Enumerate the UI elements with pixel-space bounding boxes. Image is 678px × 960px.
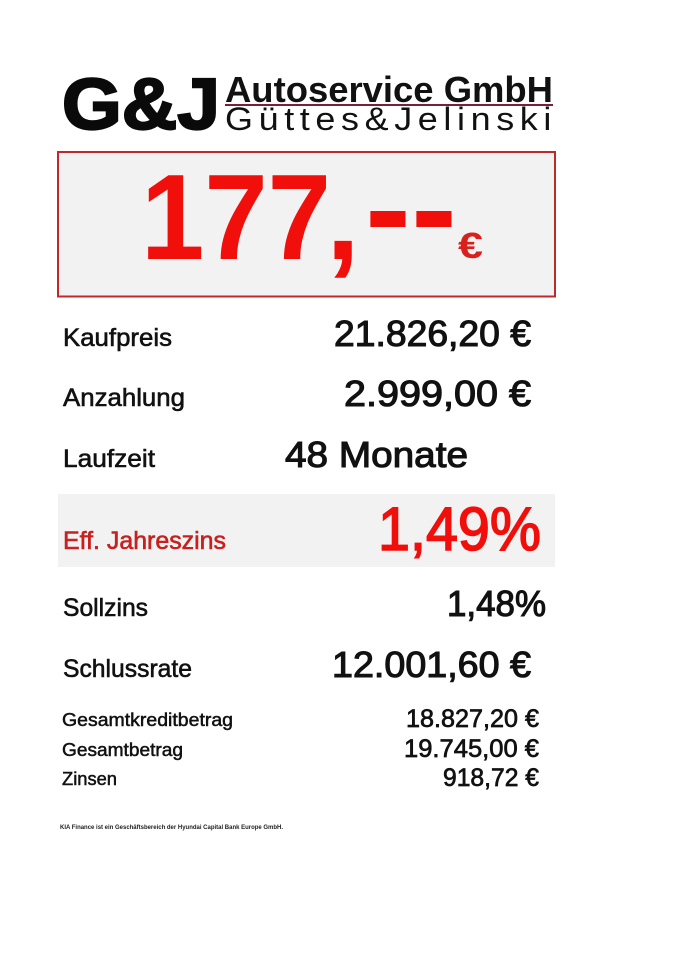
panel: monthly rate: 177: [141, 149, 331, 285]
row: Gesamtkreditbetrag: Gesamtkreditbetrag: [62, 710, 233, 730]
row: Gesamtkreditbetrag: 18.827,20 €: [406, 705, 539, 733]
row: Gesamtbetrag: 19.745,00 €: [404, 735, 539, 763]
panel: monthly rate: ,: [326, 149, 360, 285]
logo: G&J Autoservice GmbH: [62, 65, 557, 145]
row: Kaufpreis: [63, 313, 531, 354]
row: Sollzins: 1,48%: [447, 583, 546, 624]
panel: monthly rate: [58, 132, 555, 296]
row: Eff. Jahreszins highlight: 1,49%: [378, 495, 541, 563]
row: Eff. Jahreszins highlight: [58, 494, 555, 567]
row: Kaufpreis: Kaufpreis: [63, 324, 172, 352]
row: Sollzins: [63, 583, 546, 624]
row: Schlussrate: Schlussrate: [63, 655, 192, 683]
row: Anzahlung: Anzahlung: [63, 384, 185, 412]
row: Zinsen: [62, 764, 539, 792]
footnote: KIA Finance ist ein Geschäftsbereich der Hyundai Capital Bank Europe GmbH.: [60, 825, 283, 831]
row: Kaufpreis: 21.826,20 €: [334, 313, 531, 354]
row: Schlussrate: 12.001,60 €: [332, 644, 531, 685]
logo: G&J Autoservice GmbH: Güttes&Jelinski: [225, 101, 557, 137]
panel: monthly rate: --: [365, 132, 457, 283]
row: Gesamtkreditbetrag: [62, 705, 539, 733]
row: Gesamtbetrag: [62, 735, 539, 763]
row: Laufzeit: 48 Monate: [285, 434, 468, 475]
row: Laufzeit: [63, 434, 468, 475]
row: Laufzeit: Laufzeit: [63, 445, 155, 473]
row: Gesamtbetrag: Gesamtbetrag: [62, 740, 183, 760]
row: Zinsen: Zinsen: [62, 769, 117, 789]
row: Eff. Jahreszins highlight: Eff. Jahreszins: [63, 527, 226, 555]
logo: G&J Autoservice GmbH: Autoservice GmbH: [225, 69, 553, 110]
row: Anzahlung: [63, 373, 531, 414]
row: Zinsen: 918,72 €: [443, 764, 539, 792]
logo: G&J Autoservice GmbH: G&J: [62, 65, 220, 145]
row: Anzahlung: 2.999,00 €: [344, 373, 531, 414]
row: Sollzins: Sollzins: [63, 594, 148, 622]
row: Schlussrate: [63, 644, 531, 685]
panel: monthly rate: €: [458, 225, 483, 266]
